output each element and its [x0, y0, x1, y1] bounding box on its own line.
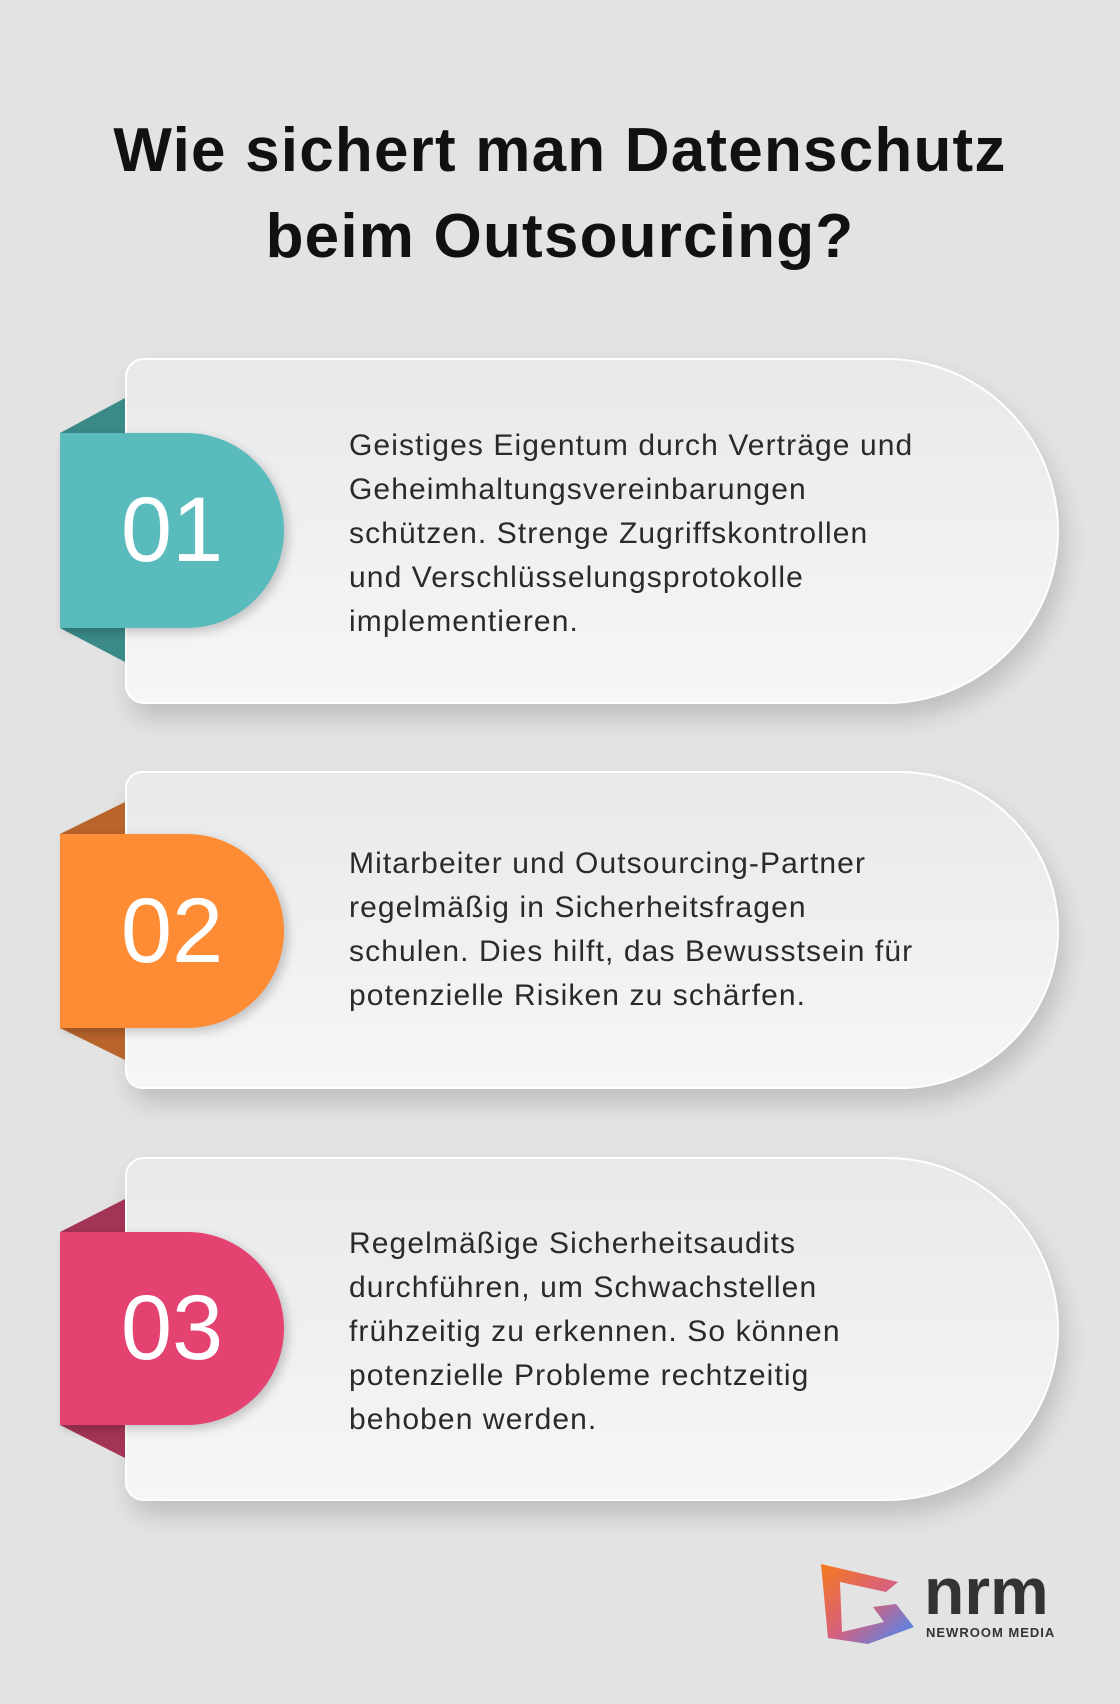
text 1: implementieren. [349, 605, 579, 638]
logo: NEWROOM MEDIA [926, 1625, 1055, 1640]
text 1: schützen. Strenge Zugriffskontrollen [349, 517, 868, 550]
panel: step 1 [60, 358, 1073, 726]
card 2 [125, 771, 1059, 1089]
text 2: schulen. Dies hilft, das Bewusstsein für [349, 935, 913, 968]
panel: step 2 [60, 771, 1073, 1112]
tab 02: 02 [121, 880, 223, 982]
text 1: Geheimhaltungsvereinbarungen [349, 473, 807, 506]
title [113, 116, 1007, 271]
text 3: Regelmäßige Sicherheitsaudits [349, 1227, 796, 1260]
logo text: nrm [924, 1554, 1049, 1628]
tab 02 [60, 834, 284, 1028]
text 3: behoben werden. [349, 1403, 597, 1436]
title: Wie sichert man Datenschutz [113, 116, 1007, 185]
text 1: Geistiges Eigentum durch Verträge und [349, 429, 913, 462]
text 2 [349, 847, 913, 1012]
fold 2 [60, 802, 125, 1060]
logo icon [821, 1564, 914, 1644]
tab 03 [60, 1232, 284, 1425]
panel: step 3 [60, 1157, 1073, 1524]
text 3: frühzeitig zu erkennen. So können [349, 1315, 841, 1348]
text 3 [349, 1227, 841, 1436]
logo [821, 1554, 1055, 1644]
text 2: potenzielle Risiken zu schärfen. [349, 979, 806, 1012]
card 3 [125, 1157, 1059, 1501]
fold 1 [60, 398, 125, 662]
title: beim Outsourcing? [266, 202, 854, 271]
fold 3 [60, 1199, 125, 1458]
text 3: durchführen, um Schwachstellen [349, 1271, 817, 1304]
text 1: und Verschlüsselungsprotokolle [349, 561, 804, 594]
tab 01: 01 [121, 479, 223, 581]
text 2: Mitarbeiter und Outsourcing-Partner [349, 847, 866, 880]
card 1 [125, 358, 1059, 704]
text 2: regelmäßig in Sicherheitsfragen [349, 891, 807, 924]
text 1 [349, 429, 913, 638]
tab 01 [60, 433, 284, 628]
text 3: potenzielle Probleme rechtzeitig [349, 1359, 809, 1392]
tab 03: 03 [121, 1277, 223, 1379]
